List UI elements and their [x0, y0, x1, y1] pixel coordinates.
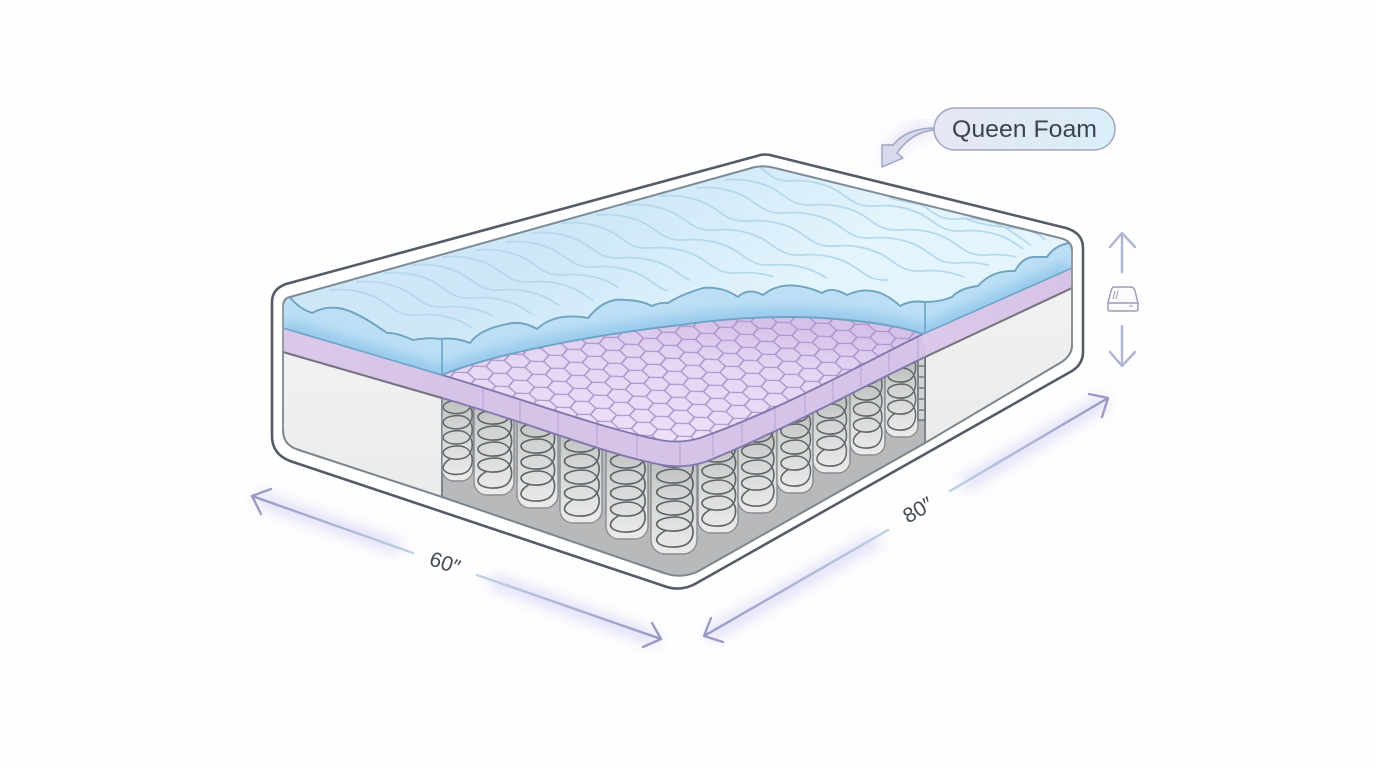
arrow glow [708, 400, 1106, 636]
cavity floor [442, 345, 925, 576]
callout text: Queen Foam [952, 116, 1097, 143]
up arrow [1110, 233, 1135, 272]
callout arrow [882, 128, 935, 167]
purple layer lower edge lines [283, 288, 1072, 398]
callout pill [934, 108, 1115, 150]
pocket spring 6 [651, 437, 697, 554]
down arrow [1110, 326, 1135, 366]
callout: Queen Foam [882, 108, 1115, 167]
pocket spring 1 [442, 370, 473, 481]
pocket spring 8 [738, 396, 777, 513]
label: 80″ [899, 492, 938, 528]
dimension: 60 inch width [252, 489, 661, 647]
pocket spring 7 [698, 416, 738, 533]
left arrow [704, 530, 888, 642]
pocket spring 12 [885, 320, 918, 437]
purple comfort layer slab [442, 317, 925, 468]
rear edge of mattress [283, 166, 1072, 305]
arrow glow [256, 498, 658, 640]
spring cavity [442, 320, 925, 576]
pocket spring 3 [517, 391, 558, 508]
pocket spring 2 [474, 378, 514, 495]
mattress illustration [272, 154, 1083, 589]
icon: small mattress [1108, 287, 1138, 311]
pocket spring 11 [850, 338, 885, 455]
outer outline [272, 154, 1083, 589]
slab top edges [442, 334, 923, 442]
slab arc edge [442, 317, 923, 375]
dimension: height [1108, 233, 1138, 366]
quilting wave lines [329, 168, 1046, 329]
pocket spring 4 [560, 406, 602, 523]
right arrow [477, 575, 661, 647]
right arrow [950, 394, 1108, 491]
blue foam fold lines [283, 268, 1072, 375]
pocket spring 9 [777, 376, 813, 493]
purple layer: right band [923, 268, 1072, 357]
infographic: queen foam mattress cutaway [250, 107, 1139, 648]
label: 60″ [427, 548, 464, 580]
side frame lines [283, 250, 1072, 430]
left arrow [252, 489, 413, 553]
slab honeycomb surface [442, 317, 923, 442]
white foam side: left [283, 352, 442, 497]
scalloped front edge [290, 243, 1070, 343]
blue foam: top quilted surface [290, 166, 1070, 343]
white foam side: right [925, 288, 1072, 443]
pocket spring 10 [813, 356, 850, 473]
slab seams [483, 337, 918, 468]
arrow glow [1114, 236, 1130, 364]
slab bottom edge [442, 357, 925, 466]
slab honeycomb cells [442, 317, 923, 442]
pocket spring 13 [918, 355, 925, 420]
blue foam: side walls [284, 244, 1072, 374]
purple layer: left band [283, 328, 442, 398]
slab front face [442, 334, 925, 466]
pocket spring 5 [606, 422, 648, 539]
dimension: 80 inch length [704, 394, 1108, 642]
